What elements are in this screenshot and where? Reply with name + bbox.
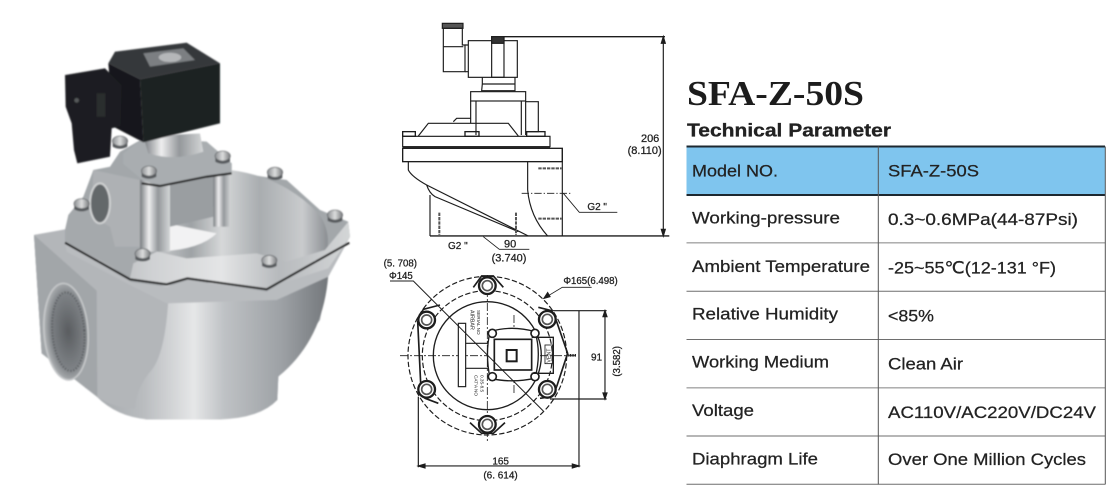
G2 bottom label and 90 dimension: (3.740) (492, 252, 526, 264)
dimension 165 (418, 311, 579, 482)
row: working pressure: 0.3~0.6MPa(44-87Psi) (888, 210, 1078, 229)
phi 145 leader (384, 259, 543, 411)
row: relative humidity: Relative Humidity (692, 304, 839, 324)
title: SFA-Z-50S (687, 74, 864, 113)
table grid lines (686, 146, 1105, 484)
dome and flange outline (403, 118, 562, 162)
gasket line (65, 243, 349, 289)
row: voltage (692, 401, 1097, 422)
pilot housing outline (471, 77, 538, 135)
G2 side port label: G2 " (587, 202, 607, 213)
parameter table (686, 146, 1105, 484)
pilot columns (140, 173, 231, 252)
row: diaphragm life (692, 450, 1086, 469)
plan view technical drawing (384, 259, 623, 482)
DIN connector (65, 68, 122, 163)
phi 145 leader: (5. 708) (384, 259, 417, 270)
dimension 91: 91 (591, 352, 603, 363)
phi 165 leader (544, 276, 618, 298)
pilot assembly top view (458, 310, 577, 396)
height dimension 206 (504, 37, 665, 236)
height dimension 206: (8.110) (628, 145, 662, 157)
pilot assembly top view: 0.35-8.5 (479, 375, 484, 392)
row: voltage: AC110V/AC220V/DC24V (888, 403, 1097, 422)
table header row (686, 146, 1105, 195)
dimension 165: 165 (492, 456, 509, 467)
G2 bottom label and 90 dimension: G2 " (448, 241, 468, 252)
row: ambient temperature (692, 257, 1056, 278)
row: ambient temperature: Ambient Temperature (692, 257, 870, 276)
dimension 91 (550, 311, 623, 399)
pilot cap (123, 133, 232, 186)
height dimension 206: 206 (641, 133, 659, 145)
pilot assembly top view: SERIAL NO (476, 310, 481, 335)
solenoid coil (108, 43, 220, 142)
center lines (400, 275, 577, 443)
side view technical drawing (403, 23, 669, 264)
row: diaphragm life: Diaphragm Life (692, 450, 818, 468)
lower flange (65, 242, 347, 303)
pilot assembly top view: CAT'A NO (473, 375, 478, 396)
pilot assembly top view: AIRBAR (469, 310, 475, 330)
row: working medium (692, 352, 963, 374)
dimension 91: (3.582) (612, 346, 623, 377)
inlet block with threaded port (34, 229, 168, 408)
pilot assembly top view: VENT (546, 348, 552, 363)
phi 145 leader: Φ145 (389, 271, 413, 282)
connector and solenoid outline (442, 23, 517, 77)
table header row: Model NO. (692, 162, 778, 180)
bolts (74, 136, 343, 268)
dome highlight wedge (157, 224, 217, 252)
G2 bottom label and 90 dimension: 90 (504, 238, 516, 250)
G2 side port label (563, 193, 617, 213)
row: voltage: Voltage (692, 401, 754, 420)
bolt holes (418, 276, 568, 433)
upper flange front strip (130, 222, 350, 288)
valve body outline (408, 148, 669, 236)
row: working medium: Clean Air (888, 354, 963, 374)
row: ambient temperature: -25~55℃(12-131 °F) (888, 258, 1056, 278)
row: working pressure: Working-pressure (692, 208, 840, 228)
dimension 165: (6. 614) (483, 471, 518, 482)
row: working pressure (692, 208, 1078, 229)
phi 165 leader: Φ165(6.498) (563, 276, 618, 287)
dome (157, 170, 328, 273)
row: relative humidity: <85% (888, 306, 934, 326)
pilot port boss (90, 170, 143, 247)
row: relative humidity (692, 304, 934, 326)
G2 bottom label and 90 dimension (448, 237, 529, 264)
row: diaphragm life: Over One Million Cycles (888, 450, 1086, 469)
product photo: pulse valve (34, 43, 350, 419)
subtitle: Technical Parameter (687, 120, 891, 140)
table header row: SFA-Z-50S (888, 162, 979, 180)
row: working medium: Working Medium (692, 352, 829, 372)
left flange deck (65, 197, 157, 278)
concentric circles (408, 276, 567, 435)
valve silhouette base (34, 138, 350, 419)
valve lower body (97, 275, 328, 419)
